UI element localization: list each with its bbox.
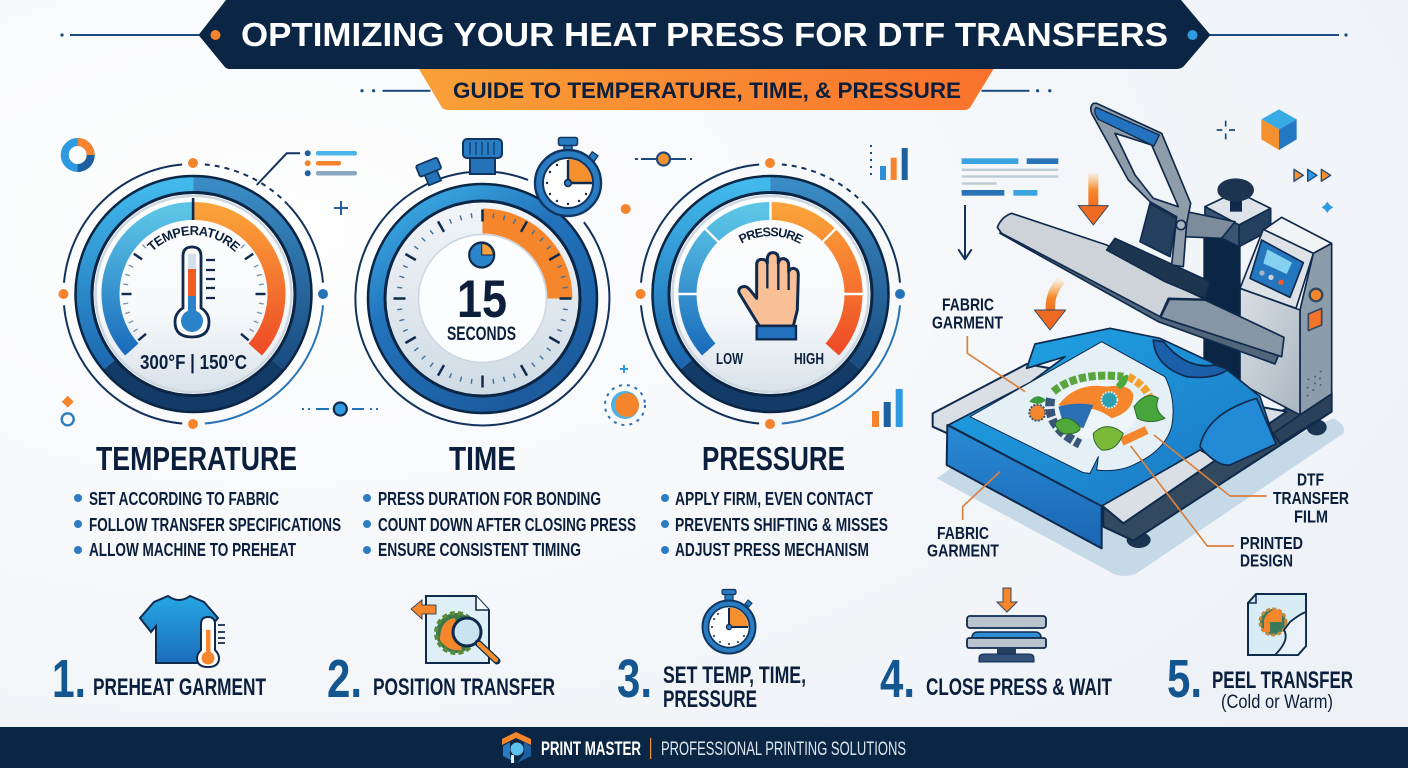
icon: closing press [967, 588, 1046, 662]
press callout: printed design: DESIGN [1240, 551, 1293, 571]
crown [463, 139, 502, 174]
bar chart icon top [871, 145, 908, 180]
bullet list: COUNT DOWN AFTER CLOSING PRESS [378, 514, 636, 535]
orange elapsed wedge [482, 208, 572, 298]
arc separators [675, 200, 866, 294]
bullet list: FOLLOW TRANSFER SPECIFICATIONS [89, 514, 341, 535]
panel: pressure text [661, 440, 888, 560]
tick marks [389, 205, 576, 392]
gauge curved label: PRESSURE [738, 228, 804, 244]
icon: pie timer [469, 242, 494, 268]
upper block [1205, 192, 1271, 247]
cabinet [1240, 217, 1332, 443]
pointer tick [192, 198, 194, 220]
step label: POSITION TRANSFER [373, 674, 555, 701]
base side [1103, 392, 1332, 541]
heat press illustration [933, 103, 1344, 576]
plus icon [334, 201, 348, 215]
bullet list: ADJUST PRESS MECHANISM [675, 539, 869, 560]
footer bar [0, 727, 1408, 768]
panel: time gauge [355, 138, 609, 425]
press column [1203, 237, 1241, 383]
bullet list [74, 488, 341, 560]
step 5: peel transfer [1167, 594, 1353, 713]
step 3: set temp time pressure [617, 590, 806, 713]
right sleeve [1200, 398, 1276, 465]
tagline: PROFESSIONAL PRINTING SOLUTIONS [661, 739, 906, 760]
logo [502, 732, 531, 763]
panel knob [1310, 289, 1322, 301]
step number: 4. [880, 649, 915, 709]
blue drape front [947, 425, 1102, 548]
high label: HIGH [794, 351, 824, 368]
temperature value: 300°F | 150°C [140, 351, 247, 374]
step 4: close press and wait [880, 588, 1112, 709]
slider glyph top [635, 152, 692, 166]
subtitle banner [360, 69, 1051, 110]
footer background [0, 727, 1408, 768]
press callout: fabric garment top [932, 295, 1003, 333]
shirt body [948, 328, 1276, 506]
triangles [1294, 169, 1331, 181]
pressure arc low [688, 211, 770, 350]
step number: 2. [327, 649, 362, 709]
handle frame [1091, 103, 1191, 267]
diamond and ring [62, 396, 74, 425]
press callout: fabric garment bottom [927, 523, 999, 561]
heading: TEMPERATURE [96, 440, 297, 477]
heading: TIME [449, 440, 516, 477]
step label: CLOSE PRESS & WAIT [926, 674, 1112, 701]
scale ticks [122, 245, 266, 340]
orange dot [621, 204, 631, 214]
step label: PRESSURE [663, 686, 757, 713]
decorative subtitle rule left [360, 89, 430, 92]
bar chart icon bottom [872, 389, 903, 427]
step label [1212, 667, 1353, 713]
donut icon [65, 142, 91, 168]
panel: temperature text [74, 440, 341, 560]
low label: LOW [716, 351, 744, 368]
step 1: preheat garment [52, 596, 266, 709]
step number: 1. [52, 649, 86, 709]
icon: stopwatch [702, 590, 756, 654]
mini legend callout [257, 150, 357, 185]
step number: 3. [617, 649, 652, 709]
title background [198, 0, 1210, 69]
divider [650, 738, 651, 759]
press callout: dtf transfer film: FILM [1294, 506, 1328, 526]
step label [663, 662, 806, 713]
panel: temperature gauge [58, 158, 328, 429]
press callout: dtf transfer film [1273, 470, 1349, 526]
press callout: dtf transfer film: TRANSFER [1273, 488, 1349, 508]
icon: cube [1261, 109, 1297, 150]
subtitle: GUIDE TO TEMPERATURE, TIME, & PRESSURE [453, 78, 961, 103]
icon: small stopwatch [535, 138, 601, 216]
title: OPTIMIZING YOUR HEAT PRESS FOR DTF TRANSFERS [241, 16, 1168, 53]
step label: SET TEMP, TIME, [663, 662, 806, 689]
title banner [60, 0, 1348, 69]
brand name: PRINT MASTER [541, 739, 641, 760]
decorative subtitle rule right [982, 89, 1051, 92]
platen front [997, 213, 1205, 317]
panel button [1308, 308, 1322, 331]
bullet list [661, 488, 888, 560]
hinge block [1140, 203, 1177, 257]
feet [1127, 419, 1327, 548]
panel: pressure gauge [636, 158, 905, 429]
step label: (Cold or Warm) [1221, 692, 1333, 713]
control screen [1250, 240, 1303, 297]
press callout: printed design: PRINTED [1240, 533, 1303, 553]
transfer film [970, 342, 1173, 473]
heading: PRESSURE [702, 440, 845, 477]
press callout: dtf transfer film: DTF [1297, 470, 1324, 490]
bullet list: ALLOW MACHINE TO PREHEAT [89, 539, 297, 560]
platen lip [1000, 225, 1283, 364]
icon: hand [739, 253, 798, 339]
bullet list: APPLY FIRM, EVEN CONTACT [675, 488, 874, 509]
handle grip [1095, 107, 1159, 146]
slider glyph between gauges [302, 402, 378, 416]
dial edges [368, 184, 597, 413]
knob [1217, 178, 1254, 212]
gauge curved label: TEMPERATURE [146, 226, 240, 252]
base top frame [933, 364, 1287, 523]
decorations around gauges [62, 142, 908, 427]
drape highlight [958, 428, 1090, 497]
step label: PREHEAT GARMENT [93, 674, 266, 701]
side button [416, 157, 446, 187]
title dot blue [1188, 30, 1198, 40]
dial face [386, 202, 580, 396]
press callout: printed design [1240, 533, 1303, 571]
icon: transfer and magnifier [411, 596, 497, 663]
small star [1322, 202, 1333, 213]
gauge shell [636, 158, 905, 429]
press callout: fabric garment bottom: GARMENT [927, 541, 999, 561]
decorative title rule right [1210, 33, 1348, 37]
small plus [620, 365, 628, 373]
floor shadow [937, 418, 1344, 576]
inner white disc [418, 234, 546, 362]
speaker holes [1307, 371, 1322, 397]
title dot orange [210, 30, 220, 40]
step number: 5. [1167, 649, 1202, 709]
pressure arc high [770, 211, 853, 350]
icon: shirt with thermometer [140, 596, 225, 667]
orbit icon [605, 385, 645, 425]
platen mount [1107, 238, 1210, 298]
outer ring [355, 171, 609, 425]
press callout: fabric garment bottom: FABRIC [937, 523, 989, 543]
arrow: orange curved [1034, 280, 1066, 330]
step 2: position transfer [327, 596, 555, 709]
scale arc cool [111, 211, 194, 350]
platen rear [1161, 299, 1284, 357]
upper arm link [1183, 212, 1235, 238]
scale arc hot [194, 211, 276, 350]
subtitle background [419, 69, 994, 110]
leader lines [963, 336, 1267, 546]
panel: time text [363, 440, 636, 560]
bullet list: PRESS DURATION FOR BONDING [378, 488, 601, 509]
icon: thermometer [175, 247, 215, 337]
icon: peeling transfer [1248, 594, 1306, 655]
arrow: orange press [1078, 173, 1108, 225]
decorative text lines [962, 158, 1058, 196]
gauge shell [58, 158, 328, 429]
bullet list: ENSURE CONSISTENT TIMING [378, 539, 581, 560]
bullet list: SET ACCORDING TO FABRIC [89, 488, 279, 509]
pivot [1176, 220, 1186, 230]
press callout: fabric garment top: GARMENT [932, 313, 1003, 333]
step label: PEEL TRANSFER [1212, 667, 1353, 694]
seconds label: SECONDS [447, 324, 516, 345]
bullet list [363, 488, 636, 560]
decorative title rule left [60, 33, 199, 37]
bullet list: PREVENTS SHIFTING & MISSES [675, 514, 888, 535]
dial ring [376, 192, 588, 404]
printed design [1029, 375, 1165, 450]
shirt neck [1153, 340, 1228, 377]
sparkle [1217, 121, 1235, 139]
press callout: fabric garment top: FABRIC [942, 295, 994, 315]
time value: 15 [457, 270, 507, 329]
arrow: thin downward [958, 205, 972, 259]
